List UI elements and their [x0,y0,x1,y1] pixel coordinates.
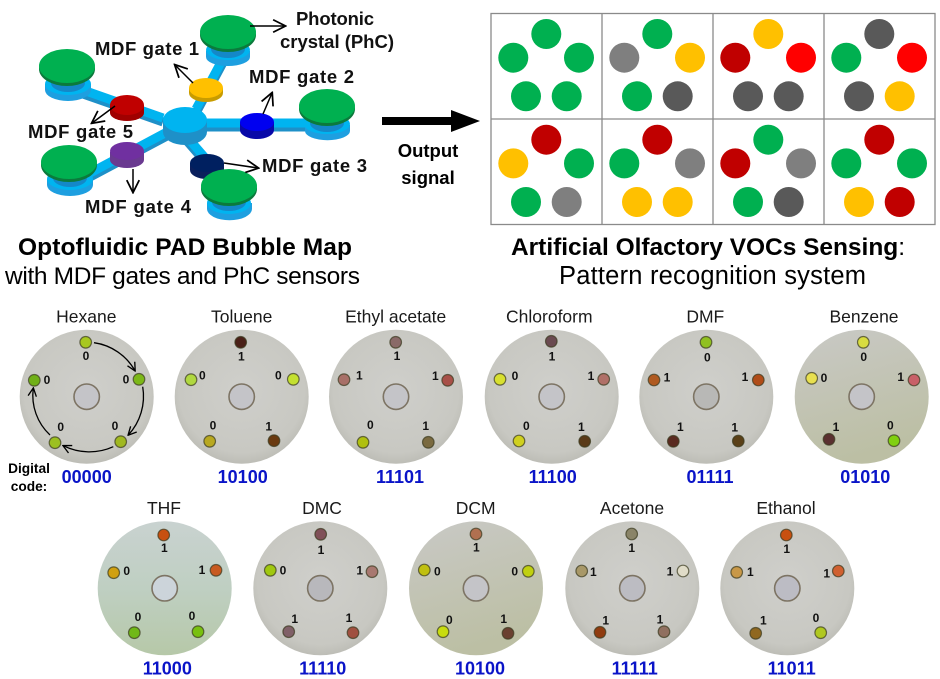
sensor disc: Toluene: 1 [238,350,245,364]
sensor disc: DMF: 1 [731,420,738,434]
code: Acetone: 11111 [612,658,658,678]
sensor disc: Chloroform: Chloroform [506,306,593,326]
heading: optofluidic PAD [4,234,360,290]
sensor disc: DMF: 1 [664,370,671,384]
sensor disc: DMF: 1 [677,420,684,434]
label: digital code [8,461,50,494]
sensor disc: Benzene: 0 [860,350,867,364]
sensor disc: Acetone: Acetone [600,498,664,518]
sensor disc: DMC: 1 [291,612,298,626]
sensor disc: Ethanol: 1 [747,565,754,579]
sensor disc: Ethyl acetate: 1 [356,368,363,382]
sensor disc: Chloroform: 0 [523,419,530,433]
sensor disc: Hexane: 0 [57,420,64,434]
label: photonic crystal [280,8,394,52]
sensor disc: Chloroform: 1 [549,350,556,364]
device diagram: optofluidic PAD [28,8,394,220]
sensor disc: Ethyl acetate: 1 [432,369,439,383]
code: Benzene: 01010 [840,467,890,487]
sensor disc: Benzene [795,306,929,464]
sensor disc: Toluene: 1 [265,420,272,434]
label: MDF gate 4: MDF gate 4 [85,196,192,217]
label: MDF gate 5: MDF gate 5 [28,121,133,142]
sensor disc: DCM [409,498,543,655]
sensor: PhC 4 [41,145,97,196]
sensor disc: Toluene: 0 [210,418,217,432]
sensor disc: THF: 1 [161,541,168,555]
sensor disc: DCM: DCM [456,498,496,518]
sensor disc: DMC: DMC [302,498,342,518]
heading: optofluidic PAD: Optofluidic PAD Bubble Map [18,234,352,261]
sensor disc: Hexane: 0 [123,372,130,386]
heading: artificial olfactory sensing: Artificial Olfactory VOCs Sensing: [511,234,905,261]
sensor disc: Hexane: 0 [112,419,119,433]
pattern cell 8 [831,125,927,217]
sensor disc: THF: 0 [135,610,142,624]
gate 5: red [110,95,144,121]
sensor disc: DCM: 0 [511,565,518,579]
label: output signal [398,140,458,188]
sensor disc: Ethyl acetate: 0 [367,418,374,432]
code: Ethanol: 11011 [768,658,816,678]
sensor: PhC 1 [200,15,256,66]
gate 3: navy [190,154,224,179]
microfluidic channels [83,53,310,177]
sensor disc: Ethanol: 1 [760,613,767,627]
gate 1: yellow [189,78,223,102]
sensor disc: DMF: 1 [742,370,749,384]
sensor disc: DMC [253,498,387,655]
sensor disc: Toluene: Toluene [211,306,272,326]
heading: artificial olfactory sensing [511,234,905,290]
sensor disc: DMF: DMF [686,306,724,326]
sensor disc: Toluene [175,306,309,464]
code: Ethyl acetate: 11101 [376,467,424,487]
code: Hexane: 00000 [62,467,112,487]
sensor disc: Ethyl acetate [329,306,463,464]
label: digital code: Digital [8,461,50,476]
sensor disc: Benzene: 1 [833,420,840,434]
sensor disc: Acetone: 1 [602,614,609,628]
sensor disc: DMC: 1 [318,543,325,557]
sensor disc: THF: THF [147,498,181,518]
sensor disc: THF: 0 [123,564,130,578]
code: Chloroform: 11100 [529,467,577,487]
code: DMC: 11110 [299,658,346,678]
sensor disc: DMC: 0 [280,564,287,578]
sensor disc: Hexane [20,306,154,464]
sensor disc: Hexane: 0 [83,349,90,363]
gate 4: purple [110,142,144,168]
code: THF: 11000 [143,658,192,678]
sensor disc: Benzene: 0 [821,371,828,385]
sensor disc: DCM: 1 [500,612,507,626]
code: Toluene: 10100 [218,467,268,487]
sensor disc: Ethanol: 1 [783,542,790,556]
sensor disc: Chloroform: 0 [512,369,519,383]
pattern cell 4 [831,19,927,111]
label: output signal: Output [398,140,458,161]
sensor disc: Ethyl acetate: 1 [394,349,401,363]
pattern cell 2 [609,19,705,111]
sensor disc: Ethanol: Ethanol [756,498,816,518]
sensor disc: Hexane: Hexane [56,306,116,326]
sensor disc: Ethyl acetate: 1 [422,419,429,433]
sensor disc: DMC: 1 [346,611,353,625]
sensor: PhC 2 [299,89,355,140]
pattern cell 6 [609,125,705,217]
sensor disc: THF [98,498,232,655]
sensor disc: DMF: 0 [704,350,711,364]
arrow: output signal [382,110,480,132]
sensor disc: DMC: 1 [356,563,363,577]
code: DMF: 01111 [686,467,734,487]
sensor disc: DCM: 0 [434,565,441,579]
label: MDF gate 3: MDF gate 3 [262,155,367,176]
sensor disc: Acetone [565,498,699,655]
sensor disc: THF: 1 [199,563,206,577]
sensor disc: Acetone: 1 [657,612,664,626]
label: output signal: signal [401,167,455,188]
sensor disc: Ethanol [720,498,854,655]
sensor disc: Benzene: 0 [887,418,894,432]
heading: artificial olfactory sensing: Pattern recognition system [559,262,866,290]
pattern cell 7 [720,125,816,217]
sensor disc: Chloroform: 1 [578,420,585,434]
sensor disc: Benzene: 1 [897,370,904,384]
sensor disc: Hexane: 0 [44,373,51,387]
sensor disc: Benzene: Benzene [829,306,899,326]
pattern grid panel [491,14,935,224]
label: photonic crystal: crystal (PhC) [280,31,394,52]
sensor disc: DCM: 1 [473,540,480,554]
sensor disc: Ethanol: 0 [813,611,820,625]
central hub [163,107,207,145]
sensor disc: Acetone: 1 [667,565,674,579]
sensor disc: Toluene: 0 [199,368,206,382]
sensor disc: DMF [639,306,773,464]
pattern cell 5 [498,125,594,217]
sensor disc: Ethanol: 1 [823,566,830,580]
label: digital code: code: [11,479,47,494]
sensor disc: Acetone: 1 [628,541,635,555]
sensor: PhC 3 [201,169,257,220]
code: DCM: 10100 [455,658,505,678]
label: photonic crystal: Photonic [296,8,374,29]
sensor disc: Ethyl acetate: Ethyl acetate [345,306,446,326]
grid frame [491,14,935,224]
sensor disc: Chloroform [485,306,619,464]
pointer arrows [92,26,285,192]
label: MDF gate 1: MDF gate 1 [95,38,199,59]
sensor disc: THF: 0 [189,609,196,623]
pattern cell 3 [720,19,816,111]
sensor disc: Toluene: 0 [275,368,282,382]
sensor disc: DCM: 0 [446,613,453,627]
pattern cell 1 [498,19,594,111]
label: MDF gate 2: MDF gate 2 [249,66,354,87]
circular readout arrows [33,343,144,452]
heading: optofluidic PAD: with MDF gates and PhC sensors [4,263,360,290]
sensor disc: Acetone: 1 [590,565,597,579]
sensor disc: Chloroform: 1 [588,369,595,383]
sensor: PhC 5 [39,49,95,101]
gate 2: blue [240,113,274,139]
